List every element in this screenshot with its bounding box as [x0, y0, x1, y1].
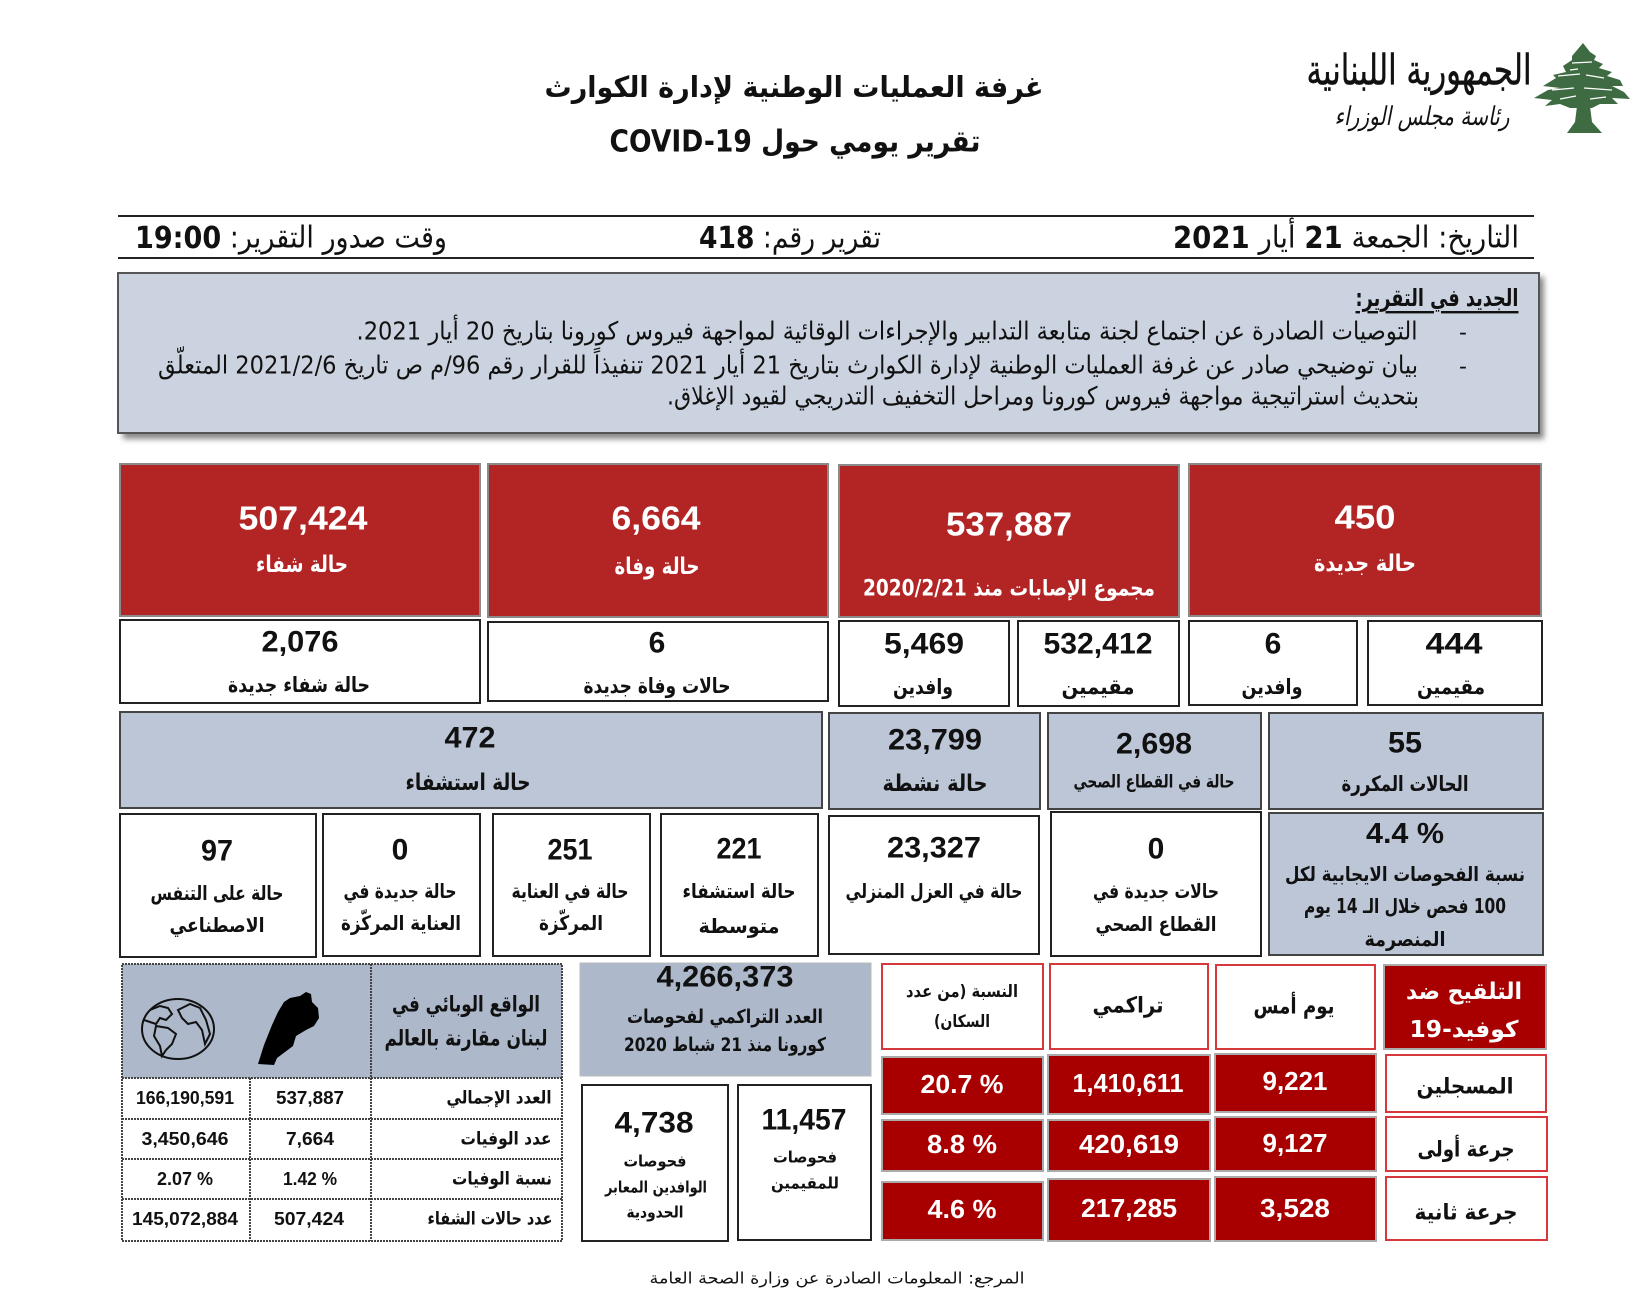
row: first dose — [882, 1117, 1547, 1171]
row: first dose: 420,619 — [1079, 1129, 1179, 1159]
value: 11,457 — [762, 1104, 846, 1136]
label: حالة شفاء — [256, 552, 348, 578]
header: yesterday — [1216, 965, 1375, 1049]
value: 4.4 % — [1366, 818, 1444, 850]
logo text: presidency of the council of ministers: رئاسة مجلس الوزراء — [1334, 102, 1510, 132]
value: 450 — [1334, 498, 1396, 536]
card: moderate hospitalisation: متوسطة — [698, 914, 780, 938]
card: home isolation — [829, 816, 1039, 954]
value: 6,664 — [612, 500, 701, 536]
row: death rate: 1.42 % — [283, 1169, 337, 1189]
title: غرفة العمليات الوطنية لإدارة الكوارث — [544, 70, 1044, 104]
card: recoveries — [120, 464, 480, 616]
value: 6 — [649, 626, 665, 660]
card: total infections residents — [1018, 621, 1179, 706]
value: 23,327 — [887, 832, 981, 864]
card: residents tests — [738, 1085, 871, 1240]
card: positivity rate: المنصرمة — [1364, 927, 1446, 951]
header: share of population — [882, 964, 1043, 1049]
row: recoveries: 507,424 — [274, 1209, 344, 1229]
value: 472 — [444, 722, 496, 754]
bullet text line 3: بتحديث استراتيجية مواجهة فيروس كورونا ومراحل التخفيف التدريجي لقيود الإغلاق. — [667, 382, 1419, 412]
label: وافدين — [1242, 675, 1302, 699]
card: new health-sector cases: القطاع الصحي — [1096, 912, 1216, 937]
card: repeated cases — [1269, 713, 1543, 809]
header: cumulative — [1050, 964, 1208, 1049]
icon: cedar tree — [1534, 43, 1630, 133]
row: second dose: 217,285 — [1081, 1193, 1177, 1223]
card: arrivals tests — [582, 1085, 728, 1241]
card: on ventilator: الاصطناعي — [170, 913, 264, 938]
row: second dose: 3,528 — [1260, 1193, 1330, 1223]
row: first dose: 9,127 — [1262, 1128, 1328, 1158]
table heading: الواقع الوبائي في — [392, 992, 540, 1018]
label: العدد التراكمي لفحوصات — [627, 1006, 823, 1028]
card: total infections arrivals — [839, 621, 1009, 706]
panel: what is new in the report: - — [1459, 354, 1467, 380]
row: first dose: 8.8 % — [927, 1129, 997, 1159]
card: positivity rate — [1269, 813, 1543, 955]
row: death rate — [157, 1168, 552, 1190]
header: share of population: النسبة (من عدد — [906, 982, 1018, 1002]
row: death rate: 2.07 % — [157, 1169, 213, 1189]
title — [544, 70, 1044, 160]
row: death rate: نسبة الوفيات — [452, 1168, 552, 1190]
value: 2,698 — [1116, 728, 1192, 760]
row: total: 166,190,591 — [136, 1088, 234, 1108]
header: vaccination against covid-19 — [1384, 965, 1546, 1049]
value: 23,799 — [888, 724, 982, 756]
label: مقيمين — [1062, 675, 1134, 699]
card: arrivals tests: الوافدين المعابر — [604, 1178, 707, 1196]
label: الحالات المكررة — [1342, 772, 1468, 796]
label: مقيمين — [1417, 675, 1485, 699]
header: vaccination against covid-19: التلقيح ضد — [1406, 979, 1522, 1005]
row: registered: 20.7 % — [920, 1069, 1004, 1099]
label: حالة في العناية — [512, 879, 628, 904]
panel: what is new in the report: - — [1459, 320, 1467, 346]
logo: Lebanese republic cedar and calligraphy — [1306, 43, 1630, 133]
label: حالات جديدة في — [1093, 879, 1219, 904]
row: deaths: 3,450,646 — [142, 1129, 228, 1149]
card: residents tests: للمقيمين — [771, 1174, 839, 1192]
label: فحوصات — [624, 1152, 686, 1170]
row: recoveries: عدد حالات الشفاء — [428, 1208, 552, 1230]
value: 2,076 — [262, 626, 338, 658]
report info bar — [118, 216, 1534, 258]
table: Lebanon compared with the world — [122, 964, 562, 1241]
row: recoveries: 145,072,884 — [132, 1209, 238, 1229]
card: new arrivals — [1189, 621, 1357, 705]
title: تقرير يومي حول COVID-19 — [610, 124, 980, 160]
row: deaths — [142, 1128, 552, 1150]
card: new ICU — [323, 814, 480, 956]
panel heading: الجديد في التقرير: — [1356, 284, 1518, 312]
header: vaccination against covid-19: كوفيد-19 — [1410, 1017, 1519, 1043]
value: 537,887 — [946, 506, 1072, 542]
row: second dose: جرعة ثانية — [1414, 1200, 1518, 1226]
value: 4,266,373 — [656, 960, 794, 994]
icon: map of Lebanon — [258, 992, 319, 1065]
card: cumulative tests: كورونا منذ 21 شباط 2020 — [624, 1034, 827, 1056]
row: total: العدد الإجمالي — [446, 1088, 552, 1108]
label: حالة استشفاء — [682, 879, 796, 903]
label: حالة في العزل المنزلي — [846, 879, 1022, 904]
value: 97 — [201, 834, 233, 868]
label: حالات وفاة جديدة — [584, 674, 730, 698]
table: Lebanon compared with the world: لبنان مقارنة بالعالم — [384, 1026, 548, 1052]
card: ICU — [493, 814, 650, 956]
row: recoveries — [132, 1208, 552, 1230]
value: 55 — [1388, 726, 1422, 760]
label: حالة نشطة — [882, 771, 988, 797]
card: active cases — [829, 713, 1040, 809]
label: حالة في القطاع الصحي — [1074, 772, 1234, 792]
panel: what is new in the report — [118, 273, 1544, 439]
value: 251 — [548, 834, 592, 866]
value: 4,738 — [614, 1106, 694, 1140]
logo text: republic name: الجمهورية اللبنانية — [1306, 46, 1532, 96]
label: نسبة الفحوصات الايجابية لكل — [1285, 862, 1525, 886]
label: حالة جديدة — [1314, 551, 1416, 577]
row: registered: المسجلين — [1416, 1074, 1514, 1100]
footer source note: المرجع: المعلومات الصادرة عن وزارة الصحة العامة — [650, 1268, 1024, 1288]
card: moderate hospitalisation — [661, 814, 818, 956]
bullet text line 2: بيان توضيحي صادر عن غرفة العمليات الوطنية لإدارة الكوارث بتاريخ 21 أيار 2021 تنفيذاً للقرار رقم 96/م ص تاريخ 2021/2/6 المتعلّق — [158, 346, 1418, 380]
label: حالة شفاء جديدة — [228, 673, 370, 697]
card: new ICU: العناية المركّزة — [341, 909, 461, 935]
card: cumulative tests — [580, 960, 871, 1076]
row: deaths: عدد الوفيات — [460, 1128, 552, 1150]
card: total infections — [839, 465, 1179, 617]
report date: التاريخ: الجمعة 21 أيار 2021 — [1173, 216, 1519, 256]
label: حالة جديدة في — [344, 879, 456, 904]
card: new health-sector cases — [1051, 812, 1261, 956]
label: حالة استشفاء — [406, 770, 530, 796]
row: total — [136, 1088, 552, 1108]
card: on ventilator — [120, 814, 316, 957]
value: 5,469 — [884, 628, 964, 660]
icon: globe — [142, 999, 214, 1059]
label: حالة وفاة — [614, 554, 700, 580]
label: فحوصات — [773, 1148, 837, 1166]
card: hospitalised — [120, 712, 822, 808]
value: 444 — [1426, 628, 1483, 660]
card: cases in health sector — [1048, 713, 1261, 809]
row: total: 537,887 — [276, 1088, 344, 1108]
row: first dose: جرعة أولى — [1418, 1134, 1514, 1162]
header: cumulative: تراكمي — [1092, 994, 1164, 1018]
report number: تقرير رقم: 418 — [699, 220, 881, 256]
report time: وقت صدور التقرير: 19:00 — [135, 220, 447, 256]
bullet text line 1: التوصيات الصادرة عن اجتماع لجنة متابعة التدابير والإجراءات الوقائية لمواجهة فيروس كورونا بتاريخ 20 أيار 2021. — [357, 314, 1418, 346]
value: 6 — [1265, 628, 1281, 660]
header: yesterday: يوم أمس — [1254, 990, 1334, 1020]
card: ICU: المركّزة — [539, 909, 603, 935]
row: registered: 9,221 — [1262, 1066, 1328, 1096]
card: arrivals tests: الحدودية — [626, 1202, 684, 1222]
value: 0 — [1148, 832, 1164, 866]
row: deaths: 7,664 — [286, 1129, 334, 1149]
row: registered — [882, 1054, 1546, 1114]
value: 221 — [716, 832, 762, 866]
card: new cases — [1189, 464, 1541, 616]
card: new recoveries — [120, 620, 480, 703]
label: مجموع الإصابات منذ 2020/2/21 — [863, 576, 1155, 602]
panel: vaccination table — [882, 964, 1547, 1241]
card: new residents — [1368, 621, 1542, 705]
value: 532,412 — [1044, 628, 1152, 660]
card: new deaths — [488, 622, 828, 701]
row: second dose — [882, 1177, 1547, 1241]
row: registered: 1,410,611 — [1072, 1068, 1184, 1098]
card: positivity rate: 100 فحص خلال الـ 14 يوم — [1304, 894, 1506, 918]
header: share of population: السكان) — [934, 1012, 990, 1032]
card: deaths — [488, 464, 828, 617]
row: second dose: 4.6 % — [928, 1194, 996, 1224]
value: 0 — [392, 834, 408, 866]
label: وافدين — [893, 675, 953, 699]
label: حالة على التنفس — [150, 881, 284, 905]
value: 507,424 — [238, 500, 368, 536]
